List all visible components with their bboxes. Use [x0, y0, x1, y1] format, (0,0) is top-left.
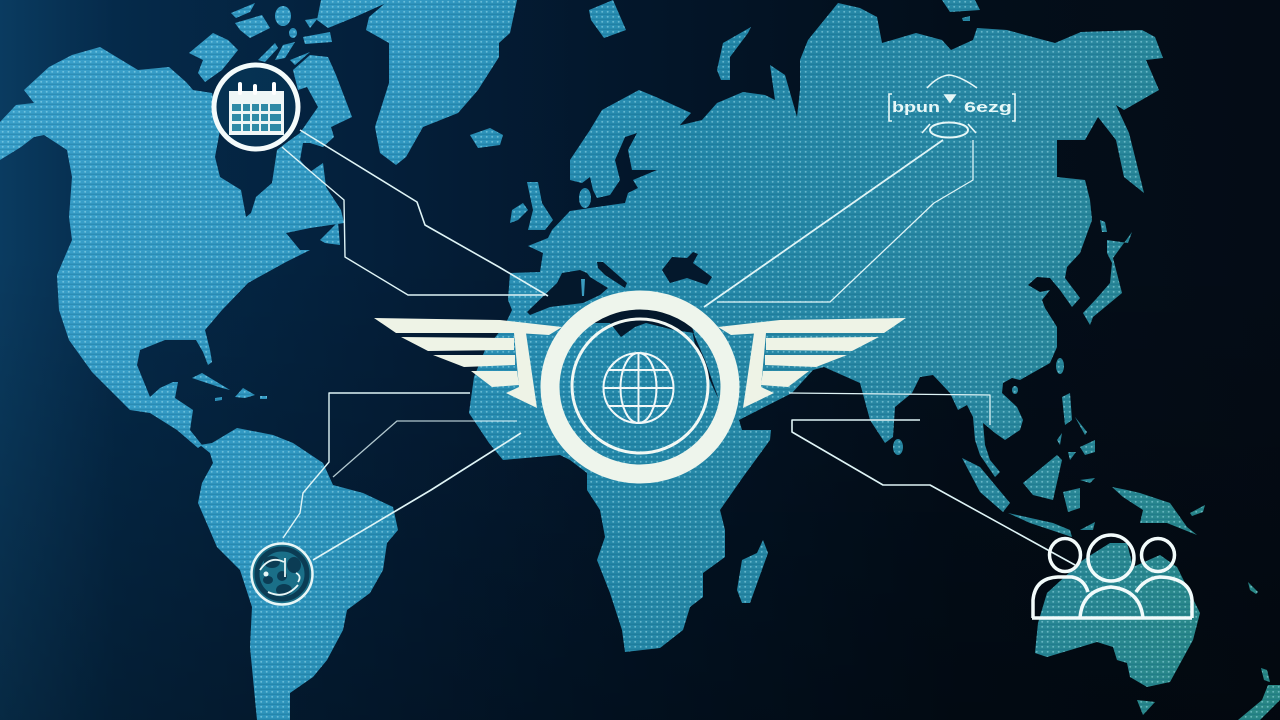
line to people icon	[792, 420, 1075, 565]
second line to South America	[333, 421, 517, 477]
Central America and Caribbean	[192, 373, 267, 401]
lines to microbe icon	[283, 393, 470, 538]
Mediterranean Sea west	[527, 270, 608, 315]
connector lines	[282, 130, 1075, 565]
North America	[0, 47, 352, 448]
Africa and Eurasia	[469, 3, 1163, 652]
centre person	[1080, 535, 1143, 618]
Japan	[1083, 220, 1132, 325]
line from calendar icon	[300, 130, 548, 296]
Italy	[581, 279, 585, 296]
European and Arctic islands	[510, 0, 980, 230]
base line	[1032, 616, 1192, 620]
second line from calendar icon	[282, 147, 545, 295]
left wing	[374, 318, 562, 408]
Taiwan, Hainan, Madagascar and Sri Lanka	[737, 358, 1064, 603]
central winged emblem	[374, 300, 906, 474]
third line to microbe icon	[313, 433, 521, 560]
lines to top right icon	[704, 140, 943, 307]
Mediterranean Sea east	[592, 307, 694, 337]
icon: globe	[604, 353, 674, 423]
badge text left: bpun	[892, 99, 940, 116]
second line to top right icon	[717, 140, 973, 302]
Iceland	[470, 128, 503, 148]
Adriatic Sea	[597, 262, 627, 288]
seas	[527, 252, 719, 400]
left person	[1033, 538, 1088, 618]
outer ring	[550, 300, 730, 474]
Black Sea	[662, 252, 712, 285]
Red Sea	[692, 330, 719, 400]
South America	[198, 428, 398, 720]
Southeast Asian islands	[962, 393, 1095, 537]
icon: three people	[1032, 535, 1192, 618]
right person	[1136, 538, 1192, 618]
Greenland	[366, 0, 517, 165]
badge text right: 6ezg	[964, 99, 1012, 116]
right wing	[718, 318, 906, 408]
line to east Asia	[789, 393, 990, 425]
inner ring	[572, 319, 708, 453]
New Guinea	[1112, 487, 1205, 535]
Arctic islands	[189, 0, 393, 245]
Tasmania and New Zealand	[1137, 582, 1280, 720]
icon: garbled badge with text	[889, 75, 1015, 138]
Australia	[1035, 543, 1200, 687]
icon: microbe circle	[252, 544, 312, 604]
icon: calendar	[214, 65, 298, 149]
